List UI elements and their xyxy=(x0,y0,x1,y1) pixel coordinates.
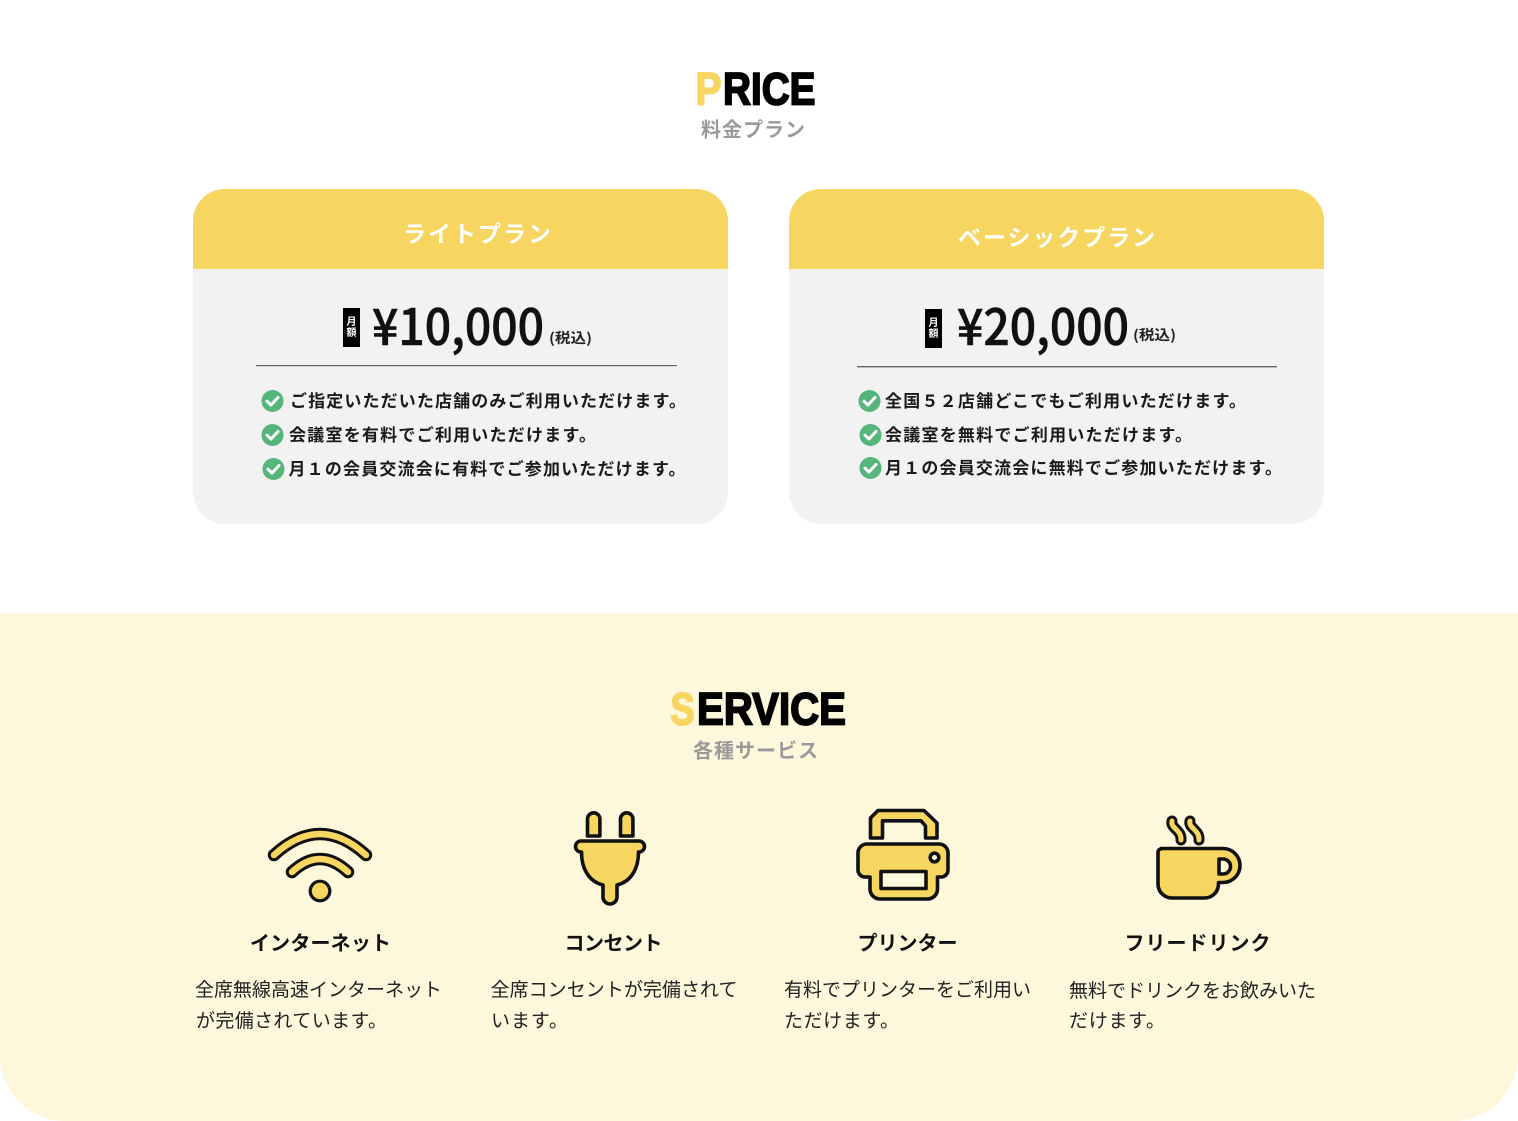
tax note: (税込) xyxy=(549,328,592,348)
service description: 全席コンセントが完備されて xyxy=(490,979,738,1001)
service name: コンセント xyxy=(564,933,662,955)
heading: SERVICE: S xyxy=(670,684,694,734)
monthly badge: 月 xyxy=(346,316,356,328)
subheading: services: 各種サービス xyxy=(693,738,818,762)
service description: ただけます。 xyxy=(784,1011,899,1032)
plan name: ベーシックプラン xyxy=(958,224,1155,250)
icon: check xyxy=(262,424,284,446)
icon: check xyxy=(860,424,882,446)
service description xyxy=(490,979,738,1032)
service description: 無料でドリンクをお飲みいた xyxy=(1069,980,1316,1002)
heading: PRICE: P xyxy=(696,64,722,114)
feature list: 会議室を有料でご利用いただけます。 xyxy=(289,425,596,445)
feature list: 会議室を無料でご利用いただけます。 xyxy=(885,425,1192,445)
price: ¥20,000 xyxy=(957,288,1129,360)
service: printer xyxy=(784,810,1031,1032)
service name: プリンター xyxy=(858,932,958,955)
service description xyxy=(784,979,1031,1032)
feature list: 月１の会員交流会に無料でご参加いただけます。 xyxy=(885,458,1282,478)
heading: SERVICE: ERVICE xyxy=(697,684,846,734)
feature list xyxy=(262,390,686,480)
icon: check xyxy=(262,458,284,480)
panel: service background xyxy=(0,613,1518,1121)
service: internet xyxy=(195,834,442,1032)
monthly badge xyxy=(925,309,942,348)
service description: 有料でプリンターをご利用い xyxy=(784,979,1031,1001)
panel: light plan xyxy=(193,189,728,524)
icon: check xyxy=(858,390,880,412)
icon: coffee cup xyxy=(1158,821,1240,898)
service: power outlet xyxy=(490,813,738,1032)
feature list: 月１の会員交流会に有料でご参加いただけます。 xyxy=(288,459,686,479)
heading: PRICE xyxy=(696,64,816,114)
plan name: ライトプラン xyxy=(403,221,551,247)
icon: printer xyxy=(858,810,948,899)
service description xyxy=(195,979,442,1032)
monthly badge xyxy=(343,308,360,347)
service: free drink xyxy=(1069,821,1316,1032)
service name: インターネット xyxy=(250,932,391,955)
monthly badge: 額 xyxy=(928,327,938,340)
feature list xyxy=(858,390,1282,479)
icon: check xyxy=(262,390,284,412)
service description: だけます。 xyxy=(1069,1011,1165,1032)
feature list: ご指定いただいた店舗のみご利用いただけます。 xyxy=(290,391,686,411)
monthly badge: 月 xyxy=(928,317,938,329)
tax note: (税込) xyxy=(1133,325,1176,345)
service description xyxy=(1069,980,1316,1032)
icon: check xyxy=(860,457,882,479)
panel: basic plan xyxy=(789,189,1324,524)
service description: います。 xyxy=(491,1011,568,1032)
price: ¥10,000 xyxy=(372,288,544,360)
icon: plug xyxy=(576,813,644,904)
icon: wifi xyxy=(274,834,366,901)
service description: が完備されています。 xyxy=(196,1010,387,1032)
service description: 全席無線高速インターネット xyxy=(195,979,442,1001)
monthly badge: 額 xyxy=(346,326,356,339)
heading: PRICE: RICE xyxy=(723,64,816,114)
subheading: price plans: 料金プラン xyxy=(701,118,805,142)
service name: フリードリンク xyxy=(1124,932,1270,955)
feature list: 全国５２店舗どこでもご利用いただけます。 xyxy=(885,391,1246,411)
